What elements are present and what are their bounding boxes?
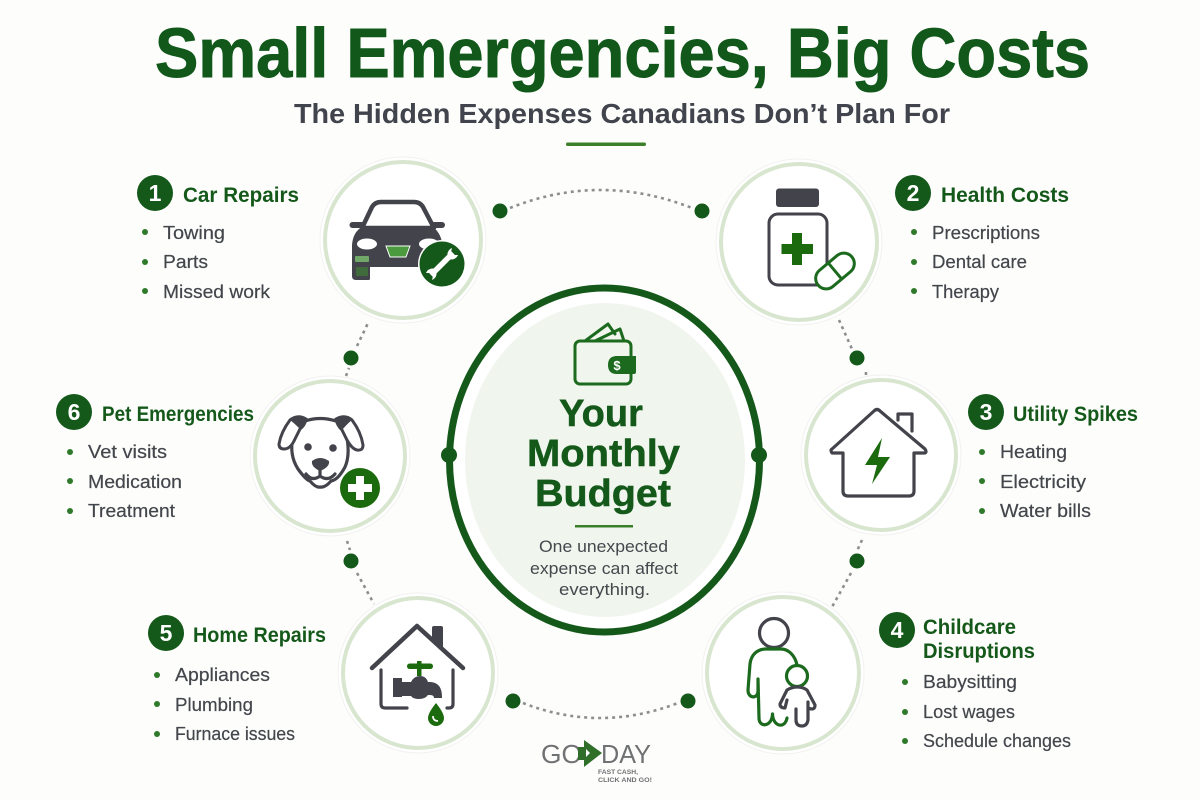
icon: house with faucet <box>372 626 463 726</box>
panel: center budget <box>441 288 767 632</box>
text: pet emergencies: Treatment <box>88 500 175 521</box>
text: car repairs: Missed work <box>163 281 271 302</box>
center caption <box>530 537 678 599</box>
logo: GoDay <box>541 739 652 784</box>
logo: GoDay: GO <box>541 739 582 769</box>
text: childcare disruptions: Childcare <box>923 616 1016 639</box>
text: car repairs: Car Repairs <box>183 184 299 207</box>
text: home repairs: Home Repairs <box>193 624 326 647</box>
text: childcare disruptions: Lost wages <box>923 701 1015 722</box>
center heading: Your <box>559 393 643 435</box>
text: home repairs: Plumbing <box>175 694 253 715</box>
connector nodes <box>344 204 864 708</box>
center caption: One unexpected <box>539 537 668 556</box>
text: pet emergencies: Vet visits <box>88 441 167 462</box>
text: utility spikes: 3 <box>980 399 992 425</box>
text: health costs: Health Costs <box>941 184 1069 207</box>
text: pet emergencies: 6 <box>68 399 80 425</box>
text: home repairs: Furnace issues <box>175 723 295 744</box>
icon: car <box>350 202 466 288</box>
text: childcare disruptions: Babysitting <box>923 671 1017 692</box>
subtitle: The Hidden Expenses Canadians Don’t Plan For <box>294 98 950 129</box>
panel: car icon <box>320 157 486 323</box>
text: car repairs <box>137 175 299 302</box>
text: health costs: 2 <box>907 180 919 206</box>
dashed connectors <box>346 190 866 718</box>
text: utility spikes: Water bills <box>1000 500 1091 521</box>
text: childcare disruptions: 4 <box>891 617 904 643</box>
icon: pill bottle <box>769 188 859 293</box>
text: utility spikes <box>968 394 1138 521</box>
title: Small Emergencies, Big Costs <box>155 14 1090 92</box>
text: home repairs: 5 <box>160 620 173 646</box>
text: car repairs: 1 <box>149 180 162 206</box>
title underline <box>566 142 646 146</box>
text: pet emergencies <box>56 394 254 521</box>
icon: adult and child <box>748 618 815 726</box>
panel: home repair icon <box>338 593 498 753</box>
panel: childcare icon <box>702 592 864 754</box>
logo: GoDay: DAY <box>601 739 651 769</box>
icon: wallet <box>575 324 636 384</box>
logo: GoDay: CLICK AND GO! <box>598 777 652 784</box>
panel: utility icon <box>801 375 961 535</box>
center heading: Monthly <box>527 433 680 475</box>
panel: health icon <box>716 159 882 325</box>
panel: pet icon <box>250 376 410 536</box>
text: pet emergencies: Medication <box>88 471 182 492</box>
text: car repairs: Towing <box>163 222 225 243</box>
text: utility spikes: Heating <box>1000 441 1067 462</box>
text: utility spikes: Electricity <box>1000 471 1087 492</box>
text: health costs <box>895 175 1069 302</box>
text: health costs: Therapy <box>932 281 1000 302</box>
text: childcare disruptions: Schedule changes <box>923 730 1071 751</box>
icon: wallet: $ <box>613 358 621 373</box>
text: childcare disruptions <box>879 612 1071 751</box>
text: home repairs: Appliances <box>175 664 270 685</box>
text: pet emergencies: Pet Emergencies <box>102 403 254 426</box>
logo: GoDay: FAST CASH, <box>598 769 638 776</box>
center caption: expense can affect <box>530 559 678 578</box>
icon: house with bolt <box>831 410 926 496</box>
center heading <box>527 393 680 515</box>
center caption: everything. <box>559 580 650 599</box>
text: home repairs <box>148 615 326 744</box>
icon: wrench badge <box>418 240 466 288</box>
text: health costs: Prescriptions <box>932 222 1040 243</box>
text: utility spikes: Utility Spikes <box>1013 403 1138 426</box>
center heading: Budget <box>535 473 671 515</box>
text: health costs: Dental care <box>932 251 1027 272</box>
icon: plus badge <box>338 466 382 510</box>
icon: dog with plus <box>279 417 382 510</box>
text: car repairs: Parts <box>163 251 208 272</box>
text: childcare disruptions: Disruptions <box>923 640 1035 663</box>
